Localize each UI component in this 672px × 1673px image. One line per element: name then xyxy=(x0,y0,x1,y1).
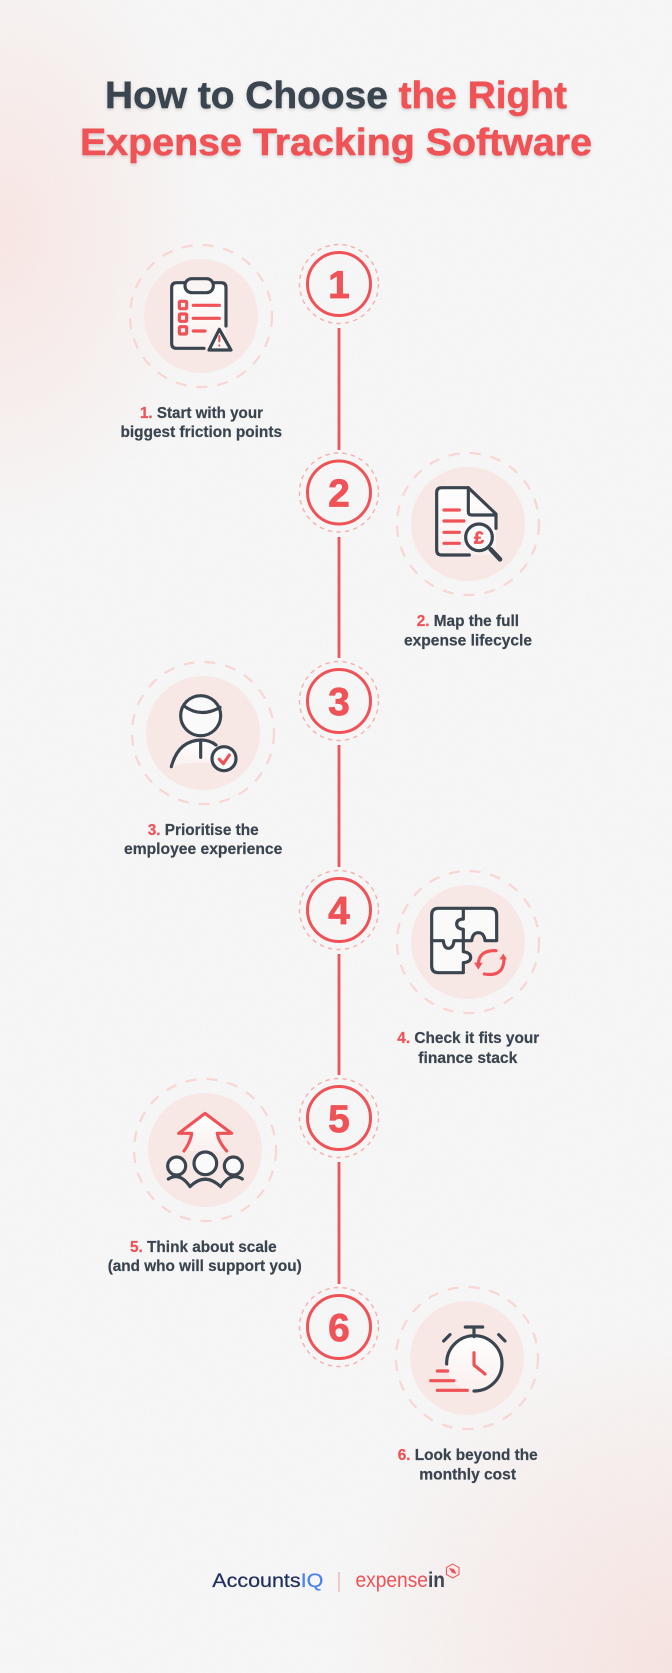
number marker 5: 5 xyxy=(328,1098,350,1141)
number marker 3 xyxy=(300,662,378,740)
step 3 label: employee experience xyxy=(124,841,283,858)
step 2 panel xyxy=(397,453,539,650)
number marker 6: 6 xyxy=(328,1307,350,1350)
step 2 label: expense lifecycle xyxy=(404,632,532,650)
step 4 label: 4. Check it fits your xyxy=(397,1030,539,1047)
title: Expense Tracking Software xyxy=(80,122,592,164)
connector 2 to 3 xyxy=(338,537,340,658)
step 4 label: finance stack xyxy=(418,1050,518,1067)
step 6 label xyxy=(398,1447,538,1484)
step 4 panel xyxy=(397,871,539,1067)
number marker 1 xyxy=(300,244,378,324)
number marker 4: 4 xyxy=(328,890,350,933)
step 2 label: 2. Map the full xyxy=(417,613,519,630)
number marker 2 xyxy=(300,453,378,532)
step 5 label: (and who will support you) xyxy=(108,1258,302,1275)
step 6 label: monthly cost xyxy=(419,1466,516,1484)
connector 1 to 2 xyxy=(338,328,340,450)
timeline with numbered markers xyxy=(300,244,378,1366)
step 1 label: biggest friction points xyxy=(120,424,282,441)
step 2 label xyxy=(404,613,532,650)
divider xyxy=(338,1572,340,1592)
connector 4 to 5 xyxy=(338,954,340,1075)
connector 5 to 6 xyxy=(338,1162,340,1284)
step 4 label xyxy=(397,1030,539,1067)
icon: document with pound magnifier: £ xyxy=(474,528,484,548)
logo: AccountsIQ: Accounts IQ xyxy=(212,1571,323,1592)
title: How to Choose the Right xyxy=(105,75,567,117)
step 6 label: 6. Look beyond the xyxy=(398,1447,538,1464)
number marker 6 xyxy=(300,1288,378,1366)
step 6 panel xyxy=(396,1287,538,1484)
number marker 5 xyxy=(300,1078,378,1158)
step 5 label xyxy=(108,1239,302,1275)
title xyxy=(80,75,592,164)
icon: expensein hexagon mark xyxy=(446,1564,459,1578)
step 1 label xyxy=(120,405,282,441)
number marker 1: 1 xyxy=(328,264,350,307)
step 5 panel xyxy=(108,1079,302,1275)
step 1 label: 1. Start with your xyxy=(140,405,263,422)
number marker 4 xyxy=(300,870,378,950)
step 5 label: 5. Think about scale xyxy=(130,1239,277,1256)
icon: clipboard with warning xyxy=(172,279,231,350)
number marker 2: 2 xyxy=(328,472,350,516)
connector 3 to 4 xyxy=(338,745,340,867)
logo: expensein: expensein xyxy=(356,1569,445,1592)
step 3 label xyxy=(124,822,283,858)
icon: team with growth arrow xyxy=(168,1113,242,1187)
icon: employee with check badge xyxy=(171,696,236,771)
icon: stopwatch with speed lines xyxy=(431,1327,505,1391)
step 3 label: 3. Prioritise the xyxy=(148,822,259,839)
step 3 panel xyxy=(124,662,283,858)
number marker 3: 3 xyxy=(328,681,350,724)
icon: puzzle with sync arrows xyxy=(432,908,507,974)
step 1 panel xyxy=(120,245,282,441)
icon: document with pound magnifier xyxy=(437,488,500,559)
footer logos xyxy=(212,1564,459,1592)
